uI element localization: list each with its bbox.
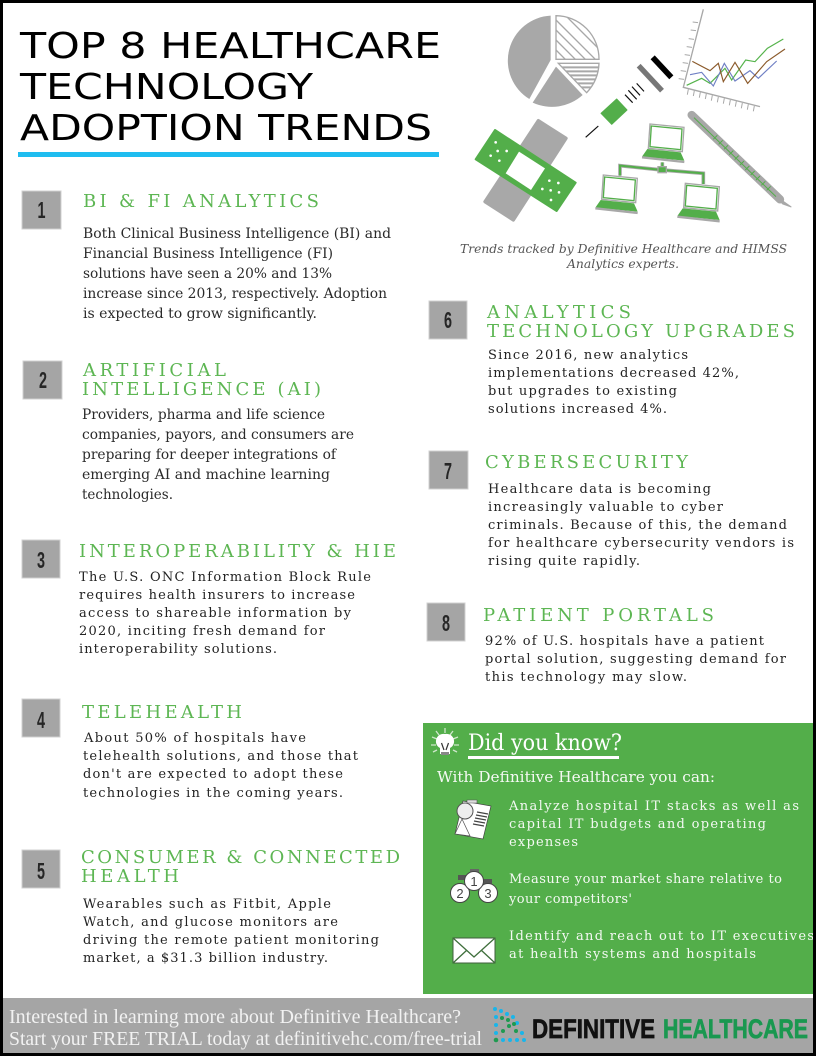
- trend 3: interoperability: [22, 540, 396, 657]
- icon: thermometer: [692, 115, 791, 207]
- logo wordmark: [532, 1014, 808, 1044]
- trend 5: consumer and connected health: [22, 847, 400, 966]
- logo wordmark: DEFINITIVE: [532, 1014, 655, 1044]
- body 6: but upgrades to existing: [488, 384, 677, 399]
- body 7: criminals. Because of this, the demand: [488, 518, 787, 533]
- icon: pie chart: [508, 15, 600, 107]
- caption: Trends tracked by Definitive Healthcare and HIMSS: [460, 241, 787, 256]
- trend 6: analytics technology upgrades: [429, 301, 795, 417]
- heading 4: TELEHEALTH: [82, 702, 242, 723]
- title: TECHNOLOGY: [19, 67, 314, 108]
- body 3: access to shareable information by: [79, 606, 352, 621]
- heading 3: INTEROPERABILITY & HIE: [79, 541, 396, 562]
- body 5: driving the remote patient monitoring: [83, 933, 379, 948]
- text: analyze: [508, 799, 799, 850]
- body 6: implementations decreased 42%,: [488, 366, 739, 381]
- body 7: [488, 482, 794, 569]
- text: identify: [509, 929, 814, 962]
- body 5: [83, 897, 379, 966]
- body 3: 2020, inciting fresh demand for: [79, 624, 326, 639]
- icon: bandage: [476, 121, 576, 220]
- body 2: Providers, pharma and life science: [82, 407, 325, 423]
- body 8: [485, 634, 787, 685]
- trend 4: telehealth: [22, 699, 359, 801]
- trend 7: cybersecurity: [429, 451, 794, 569]
- icon: medals: 3: [484, 886, 492, 901]
- body 8: portal solution, suggesting demand for: [485, 652, 787, 667]
- illustration cluster: [476, 9, 791, 221]
- title: ADOPTION TRENDS: [20, 108, 432, 149]
- body 4: don't are expected to adopt these: [83, 767, 343, 782]
- heading 8: PATIENT PORTALS: [483, 605, 714, 626]
- number badge 1: [22, 191, 61, 229]
- icon: medals: [450, 869, 498, 902]
- icon: clipboard and magnifier: [455, 800, 491, 839]
- number badge 6: [429, 301, 467, 339]
- heading: did you know: Did you know?: [468, 731, 622, 756]
- footer call to action: Start your FREE TRIAL today at definitivehc.com/free-trial: [9, 1028, 482, 1050]
- text: measure: your competitors': [508, 892, 632, 907]
- number badge 2: 2: [39, 367, 47, 393]
- heading 2: INTELLIGENCE (AI): [82, 379, 321, 400]
- body 2: preparing for deeper integrations of: [82, 447, 338, 463]
- body 6: [488, 348, 739, 417]
- footer call to action: [9, 1006, 482, 1050]
- icon: syringe segments: [586, 57, 671, 137]
- title underline: [18, 152, 439, 157]
- text: measure: [508, 872, 782, 907]
- trend 2: artificial intelligence: [23, 360, 354, 503]
- body 8: 92% of U.S. hospitals have a patient: [485, 634, 765, 649]
- number badge 3: 3: [37, 547, 45, 573]
- number badge 7: 7: [444, 458, 452, 484]
- body 6: Since 2016, new analytics: [488, 348, 688, 363]
- number badge 2: [23, 361, 62, 399]
- caption: [460, 241, 787, 271]
- trend 1: BI and FI analytics: [22, 191, 391, 322]
- number badge 5: [22, 850, 60, 888]
- icon: line chart: [679, 9, 785, 111]
- number badge 1: 1: [38, 197, 46, 223]
- caption: Analytics experts.: [566, 256, 679, 271]
- text: analyze: Analyze hospital IT stacks as well as: [508, 799, 799, 814]
- number badge 3: [22, 540, 60, 578]
- body 7: for healthcare cybersecurity vendors is: [488, 536, 794, 551]
- footer call to action: Interested in learning more about Definitive Healthcare?: [9, 1006, 461, 1028]
- body 1: increase since 2013, respectively. Adoption: [83, 286, 387, 302]
- body 8: this technology may slow.: [485, 670, 687, 685]
- heading 5: [81, 847, 400, 887]
- heading 6: ANALYTICS: [486, 302, 631, 323]
- trend 8: patient portals: [427, 603, 787, 685]
- body 2: companies, payors, and consumers are: [82, 427, 354, 443]
- body 1: Both Clinical Business Intelligence (BI) and: [83, 226, 391, 242]
- body 3: The U.S. ONC Information Block Rule: [79, 570, 371, 585]
- body 2: emerging AI and machine learning: [82, 467, 330, 483]
- body 1: [83, 226, 391, 322]
- icon: light bulb: [431, 728, 459, 755]
- number badge 5: 5: [37, 858, 45, 884]
- body 4: telehealth solutions, and those that: [83, 749, 359, 764]
- body 3: interoperability solutions.: [79, 642, 277, 657]
- text: analyze: expenses: [509, 835, 578, 850]
- panel: did you know: [423, 723, 816, 994]
- body 3: requires health insurers to increase: [79, 588, 355, 603]
- body 3: [79, 570, 371, 657]
- number badge 8: 8: [442, 610, 450, 636]
- heading 6: [486, 302, 795, 342]
- heading 6: TECHNOLOGY UPGRADES: [487, 321, 795, 342]
- text: identify: at health systems and hospitals: [509, 947, 756, 962]
- number badge 6: 6: [444, 307, 452, 333]
- intro line: With Definitive Healthcare you can:: [437, 768, 715, 786]
- body 5: Watch, and glucose monitors are: [83, 915, 338, 930]
- text: identify: Identify and reach out to IT executives: [509, 929, 814, 944]
- text: measure: Measure your market share relative to: [509, 872, 782, 887]
- logo mark: [493, 1007, 526, 1042]
- body 4: About 50% of hospitals have: [83, 731, 306, 746]
- number badge 4: 4: [37, 707, 45, 733]
- body 7: Healthcare data is becoming: [488, 482, 711, 497]
- number badge 4: [22, 699, 60, 737]
- body 5: Wearables such as Fitbit, Apple: [83, 897, 331, 912]
- heading 5: HEALTH: [81, 866, 179, 887]
- body 1: solutions have seen a 20% and 13%: [83, 266, 332, 282]
- body 7: increasingly valuable to cyber: [488, 500, 724, 515]
- body 4: technologies in the coming years.: [83, 786, 343, 801]
- number badge 7: [429, 451, 468, 489]
- body 5: market, a $31.3 billion industry.: [83, 951, 328, 966]
- icon: medals: 1: [470, 874, 478, 889]
- body 6: solutions increased 4%.: [488, 402, 667, 417]
- body 4: [83, 731, 359, 801]
- body 1: Financial Business Intelligence (FI): [83, 246, 333, 262]
- icon: envelope: [453, 938, 495, 963]
- heading 1: BI & FI ANALYTICS: [83, 191, 319, 212]
- number badge 8: [427, 603, 465, 641]
- heading 5: CONSUMER & CONNECTED: [81, 847, 400, 868]
- title: [19, 26, 441, 149]
- heading 2: [82, 360, 321, 400]
- text: analyze: capital IT budgets and operating: [509, 817, 766, 832]
- body 2: [82, 407, 354, 503]
- footer band: [0, 998, 816, 1056]
- body 7: rising quite rapidly.: [488, 554, 640, 569]
- heading 7: CYBERSECURITY: [485, 452, 689, 473]
- body 2: technologies.: [82, 487, 173, 503]
- heading 2: ARTIFICIAL: [82, 360, 226, 381]
- heading underline: [468, 756, 619, 759]
- icon: laptop network: [595, 124, 720, 221]
- title: TOP 8 HEALTHCARE: [19, 26, 441, 67]
- body 1: is expected to grow significantly.: [83, 306, 317, 322]
- icon: medals: 2: [456, 886, 464, 901]
